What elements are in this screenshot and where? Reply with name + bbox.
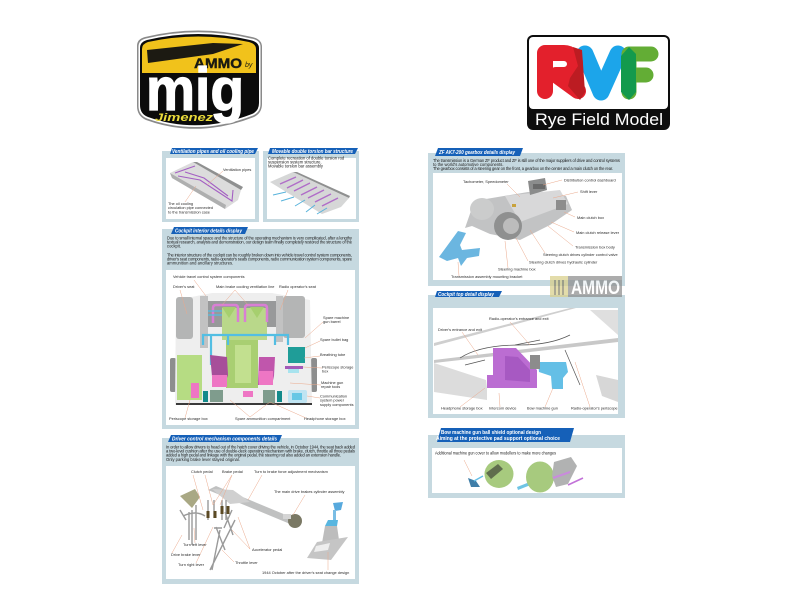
logo: Ammo by Mig Jimenez: Jimenez	[155, 112, 214, 124]
labels: gearbox components: Tachometer, Speedometer	[463, 179, 509, 184]
labels: gearbox components: Steering clutch drives cylinder control valve	[543, 252, 618, 257]
heading: bow machine gun: Aiming at the protective pad support optional choice	[436, 436, 560, 442]
heading: driver control: Driver control mechanism components details	[172, 437, 277, 443]
labels: driver components: The main drive brakes cylinder assembly	[274, 489, 345, 494]
watermark: AMMO	[550, 276, 622, 299]
labels: cockpit components: Communication	[320, 394, 347, 398]
panel: ventilation pipes and oil cooling pipe	[162, 148, 259, 222]
panel: bow machine gun ball shield	[428, 428, 625, 498]
labels: gearbox components: Distribution control dashboard	[564, 178, 616, 182]
labels: cockpit components: Driver's seat	[173, 284, 195, 289]
labels: gearbox components: Main clutch release lever	[576, 230, 620, 235]
panel: movable double torsion bar structure	[263, 148, 359, 222]
labels: cockpit components: Headphone storage box	[304, 416, 346, 421]
text: driver control description: a two-level cushion after the use of double-deck operating mechanism with brake, clutch, throttle all three pedals	[166, 448, 355, 454]
labels: cockpit top components	[438, 316, 618, 410]
text: cockpit description: Due to small internal space and the structure of the operating mechanism is very complicated, after a lengthy	[167, 236, 353, 240]
logo: Ammo by Mig Jimenez: by	[245, 62, 253, 69]
labels: driver components	[171, 469, 349, 575]
text: gearbox description: The gearbox consists of a steering gear on the front, a gearbox on the center and a main clutch on the rear.	[433, 166, 613, 171]
labels: cockpit components: box	[322, 369, 328, 374]
labels: cockpit top components: Headphone storage box	[441, 406, 483, 410]
illustration: hull floor with torsion bars	[270, 172, 350, 214]
logo: RMF Rye Field Model: Rye Field Model	[535, 110, 663, 129]
labels: cockpit components: Breathing tube	[320, 352, 345, 357]
illustration: pedals and levers linkage	[180, 486, 302, 570]
labels: cockpit components: repair tools	[321, 384, 340, 389]
labels: cockpit components: Spare bullet bag	[320, 337, 348, 342]
panel: cockpit top detail	[428, 291, 625, 418]
illustration: hull floor with ventilation pipes	[170, 162, 243, 209]
labels: driver components: Turn left lever	[183, 542, 207, 547]
labels: cockpit components: Periscope storage	[322, 364, 353, 370]
text: torsion bar description: Movable torsion bar assembly	[268, 163, 324, 168]
text: gearbox description: to the world's automotive components.	[433, 162, 504, 167]
label: oil cooling pipe: to the transmission case	[168, 209, 210, 214]
logo: Ammo by Mig Jimenez: mig	[146, 56, 244, 123]
watermark: AMMO: AMMO	[571, 278, 620, 299]
text: driver control description: In order to allow drivers to head out of the hatch cover driving the vehicle, in October 1944, the seat back added	[166, 444, 356, 450]
heading: cockpit top: Cockpit top detail display	[438, 292, 494, 298]
text: driver control description: added a high pedal and linkage with the original pedal, the steering rod also added an extension handle.	[166, 452, 341, 458]
labels: cockpit components: Spare ammunition compartment	[235, 416, 291, 421]
labels: driver components: Turn right lever	[178, 562, 205, 567]
labels: cockpit top components: Radio-operator's entrance and exit	[489, 316, 549, 321]
logo: Ammo by Mig Jimenez: AMMO	[194, 55, 242, 71]
labels: cockpit components: Vehicle travel control system components	[173, 274, 245, 279]
text: driver control description: Only parking brake lever stayed original.	[166, 457, 240, 462]
text: cockpit description: The interior structure of the cockpit can be roughly broken down into vehicle travel control system components,	[167, 252, 352, 258]
labels: driver components: Drive brake lever	[171, 552, 201, 557]
leader lines: driver	[172, 475, 328, 570]
text: cockpit description: cockpit.	[167, 244, 181, 249]
panel: ZF AK7-200 gearbox details	[428, 148, 625, 286]
panel: cockpit interior details	[162, 227, 359, 429]
labels: gearbox components: Main clutch box	[577, 215, 604, 220]
text: additional cover note: Additional machine gun cover to allow modellers to make more changes	[435, 450, 556, 456]
illustration: driver's seat	[307, 502, 348, 560]
labels: gearbox components: Transmission assembly mounting bracket	[451, 274, 523, 279]
labels: cockpit top components: Bow machine gun	[527, 406, 558, 410]
text: cockpit description: ammunition and ancillary structures.	[167, 261, 233, 266]
text: cockpit description	[167, 236, 353, 266]
labels: driver components: Turn to brake force adjustment mechanism	[254, 469, 328, 474]
label: ventilation pipes: Ventilation pipes	[223, 167, 251, 172]
heading: ventilation pipes: Ventilation pipes and oil cooling pipe	[172, 149, 254, 155]
labels: cockpit top components: Radio-operator's periscope	[571, 406, 618, 410]
text: torsion bar description: suspension system structure.	[268, 159, 322, 164]
heading: torsion bar: Movable double torsion bar structure	[272, 149, 353, 155]
labels: driver components: Clutch pedal	[191, 469, 213, 474]
panel: driver control mechanism	[162, 435, 359, 584]
labels: cockpit components	[169, 274, 354, 421]
labels: driver components: Throttle lever	[235, 560, 258, 565]
chart: cockpit cutaway illustration	[170, 293, 317, 405]
labels: gearbox components: Steering machine box	[498, 266, 536, 272]
labels: gearbox components: Steering clutch drives hydraulic cylinder	[529, 260, 598, 264]
label: oil cooling pipe: The oil cooling	[168, 201, 193, 206]
labels: cockpit components: system power	[320, 398, 345, 403]
labels: cockpit components: Machine gun	[321, 380, 343, 385]
labels: gearbox components: Transmission box body	[575, 244, 615, 250]
leader lines: gearbox	[458, 180, 578, 276]
text: torsion bar description: Complete recreation of double torsion rod	[268, 156, 345, 160]
labels: driver components: Brake pedal	[222, 469, 243, 474]
labels: gearbox components: Shift lever	[580, 189, 598, 194]
heading: bow machine gun: Bow machine gun ball shield optional design	[441, 430, 541, 436]
text: gearbox description: The transmission is a German ZF product and ZF is still one of the major suppliers of drive and control systems	[433, 158, 620, 163]
text: driver control description	[166, 444, 356, 462]
labels: cockpit components: Periscope storage box	[169, 416, 208, 421]
labels: cockpit components: gun barrel	[323, 319, 341, 324]
labels: gearbox components	[451, 178, 620, 279]
labels: cockpit top components: Intercom device	[489, 406, 516, 410]
leader lines: cockpit	[180, 280, 323, 418]
heading: bow machine gun	[436, 428, 574, 442]
text: cockpit description: driver's seat components, radio-operator's seats components, radio communication system components, spare	[167, 257, 353, 262]
labels: cockpit top components: Driver's entrance and exit	[438, 327, 483, 332]
text: gearbox description	[433, 158, 620, 171]
heading: cockpit interior: Cockpit interior details display	[175, 228, 242, 234]
leader lines: cockpit top	[460, 322, 590, 407]
labels: driver components: 1944 October after the driver's seat change design	[262, 570, 349, 575]
heading: gearbox: ZF AK7-200 gearbox details display	[438, 150, 515, 156]
labels: cockpit components: supply components	[320, 402, 354, 407]
text: cockpit description: textual research, analysis and demonstration, our design team finally completely restored the structure of the	[167, 240, 353, 245]
illustration: gearbox	[465, 178, 572, 240]
labels: driver components: Accelerator pedal	[252, 547, 282, 552]
label: oil cooling pipe: circulation pipe connected	[168, 205, 213, 210]
labels: cockpit components: Spare machine	[323, 315, 349, 320]
illustration: ball shields and mantlet	[464, 457, 583, 492]
illustration: mounting bracket	[439, 231, 480, 266]
logo: Ammo by Mig Jimenez	[137, 30, 262, 129]
labels: cockpit components: Radio operator's seat	[279, 284, 317, 289]
logo: RMF Rye Field Model	[527, 35, 670, 130]
labels: cockpit components: Main brake cooling ventilation line	[216, 284, 274, 289]
illustration: cockpit top view	[434, 308, 618, 402]
